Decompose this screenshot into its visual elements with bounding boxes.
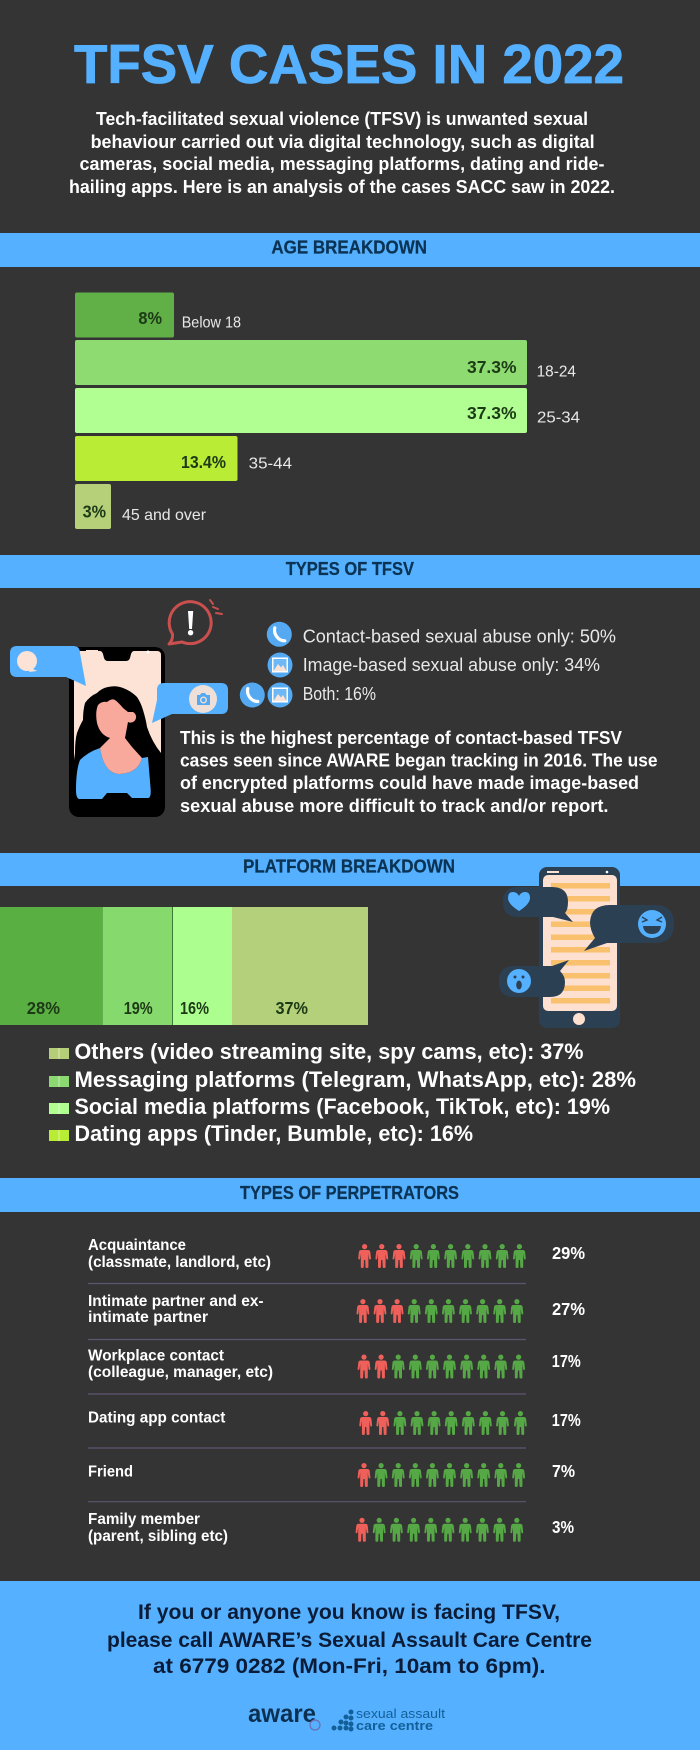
bubble: heart [503, 887, 573, 922]
phone screen [74, 651, 161, 760]
pictogram: 2 of 10 [359, 1411, 527, 1435]
row: dating app contact: 17% [552, 1410, 581, 1430]
title: TFSV CASES IN 2022 [74, 33, 624, 95]
logo: aware: aware [248, 1700, 316, 1728]
row: workplace contact: (colleague, manager, etc) [88, 1364, 273, 1381]
call to action text: please call AWARE’s Sexual Assault Care Centre [107, 1628, 592, 1652]
bar chart: age breakdown [75, 292, 580, 529]
text block: contact-based analysis: This is the highest percentage of contact-based TFSV [180, 727, 623, 748]
item: contact-based: Contact-based sexual abuse only: 50% [303, 626, 616, 647]
legend item: social media: Social media platforms (Facebook, TikTok, etc): 19% [74, 1094, 610, 1119]
row: workplace contact: Workplace contact [88, 1348, 224, 1365]
row: intimate partner [88, 1293, 585, 1326]
row: workplace contact [88, 1348, 581, 1381]
text block: contact-based analysis [180, 727, 658, 816]
shirt [76, 748, 151, 799]
pictogram: 1 of 10 [356, 1518, 523, 1542]
stacked bar chart: platforms: 28% [27, 998, 60, 1018]
call to action text: at 6779 0282 (Mon-Fri, 10am to 6pm). [153, 1654, 546, 1678]
row: acquaintance: Acquaintance [88, 1237, 186, 1254]
text block: contact-based analysis: of encrypted platforms could have made image-based [180, 772, 639, 793]
bubble: laughing face [584, 905, 674, 951]
list: types of TFSV with icons [240, 622, 616, 708]
row: family member: 3% [552, 1517, 574, 1537]
row: dating app contact [88, 1410, 581, 1435]
band: age breakdown heading [0, 233, 700, 267]
icon: alert speech bubble [169, 600, 222, 644]
illustration: woman on phone with speech bubbles [10, 646, 228, 817]
intro text block: behaviour carried out via digital technology, such as digital [91, 132, 595, 152]
call to action text [107, 1600, 592, 1678]
bar: 25-34 [75, 388, 580, 433]
item: image-based: Image-based sexual abuse only: 34% [303, 654, 600, 675]
row: family member: Family member [88, 1511, 200, 1528]
row: acquaintance [88, 1237, 585, 1271]
message stripes [551, 883, 610, 1004]
bar: 35-44: 13.4% [181, 452, 226, 472]
row: intimate partner: 27% [552, 1299, 585, 1319]
bar: below 18 [75, 292, 241, 338]
band: platform breakdown heading: PLATFORM BREAKDOWN [243, 856, 455, 877]
row: dating app contact: Dating app contact [88, 1410, 225, 1427]
logo: sexual assault care centre [332, 1706, 445, 1733]
footer panel [0, 1581, 700, 1750]
face and neck [96, 699, 142, 774]
intro text block [69, 109, 615, 197]
band: types of perpetrators heading [0, 1178, 700, 1212]
row: acquaintance: 29% [552, 1243, 585, 1263]
stacked bar chart: platforms: 19% [124, 998, 153, 1018]
pictogram: 3 of 10 [358, 1244, 526, 1268]
legend item: others: Others (video streaming site, spy cams, etc): 37% [74, 1039, 584, 1064]
bar: below 18: Below 18 [182, 314, 241, 332]
band: platform breakdown heading [0, 853, 700, 886]
bar: 25-34: 25-34 [537, 410, 580, 426]
row: family member: (parent, sibling etc) [88, 1528, 228, 1545]
row: acquaintance: (classmate, landlord, etc) [88, 1254, 271, 1271]
stacked bar chart: platforms: 37% [276, 998, 308, 1018]
pictogram: 3 of 10 [356, 1299, 523, 1323]
row: workplace contact: 17% [552, 1351, 581, 1371]
bar: below 18: 8% [138, 308, 162, 328]
text block: contact-based analysis: sexual abuse more difficult to track and/or report. [180, 795, 608, 816]
bar: 18-24 [75, 340, 576, 385]
bar: 18-24: 37.3% [467, 357, 517, 377]
band: types of perpetrators heading: TYPES OF PERPETRATORS [240, 1182, 459, 1203]
row: intimate partner: Intimate partner and ex- [88, 1293, 264, 1310]
intro text block: hailing apps. Here is an analysis of the cases SACC saw in 2022. [69, 177, 615, 197]
bar: 45 and over: 3% [83, 502, 106, 522]
intro text block: Tech-facilitated sexual violence (TFSV) is unwanted sexual [96, 109, 588, 129]
stacked bar chart: platforms [0, 907, 368, 1025]
speech bubble: chat [10, 646, 86, 686]
band: types of TFSV heading: TYPES OF TFSV [286, 558, 415, 579]
pictogram: 1 of 10 [358, 1463, 525, 1487]
intro text block: cameras, social media, messaging platforms, dating and ride- [80, 154, 605, 174]
row: intimate partner: intimate partner [88, 1309, 208, 1326]
row: friend [88, 1461, 575, 1487]
legend item: messaging: Messaging platforms (Telegram, WhatsApp, etc): 28% [74, 1067, 636, 1092]
phone body [539, 867, 620, 1028]
bar: 35-44: 35-44 [249, 456, 292, 472]
bar: 35-44 [75, 436, 292, 481]
stacked bar chart: platforms: 16% [180, 998, 209, 1018]
band: types of TFSV heading [0, 555, 700, 588]
bar: 45 and over [75, 484, 207, 529]
call to action text: If you or anyone you know is facing TFSV, [138, 1600, 560, 1624]
bar: 25-34: 37.3% [467, 403, 517, 423]
speech bubble: camera [152, 683, 228, 723]
legend: platforms [49, 1039, 636, 1146]
bar: 45 and over: 45 and over [122, 507, 207, 524]
pictogram: 2 of 10 [358, 1354, 525, 1378]
logo: sexual assault care centre: care centre [356, 1718, 433, 1733]
row: friend: 7% [552, 1461, 575, 1481]
illustration: phone with emoji speech bubbles [499, 867, 674, 1028]
phone body [69, 647, 165, 817]
bar: 18-24: 18-24 [537, 364, 576, 380]
item: both: Both: 16% [303, 683, 376, 704]
logo: sexual assault care centre: sexual assault [356, 1706, 445, 1721]
item: both [240, 682, 376, 708]
bubble: surprised face [499, 960, 569, 997]
hair [74, 686, 161, 790]
text block: contact-based analysis: cases seen since AWARE began tracking in 2016. The use [180, 750, 658, 771]
band: age breakdown heading: AGE BREAKDOWN [271, 237, 427, 258]
row: friend: Friend [88, 1464, 133, 1481]
legend item: dating apps: Dating apps (Tinder, Bumble, etc): 16% [74, 1121, 473, 1146]
row: family member [88, 1511, 574, 1545]
phone screen [543, 875, 617, 1011]
